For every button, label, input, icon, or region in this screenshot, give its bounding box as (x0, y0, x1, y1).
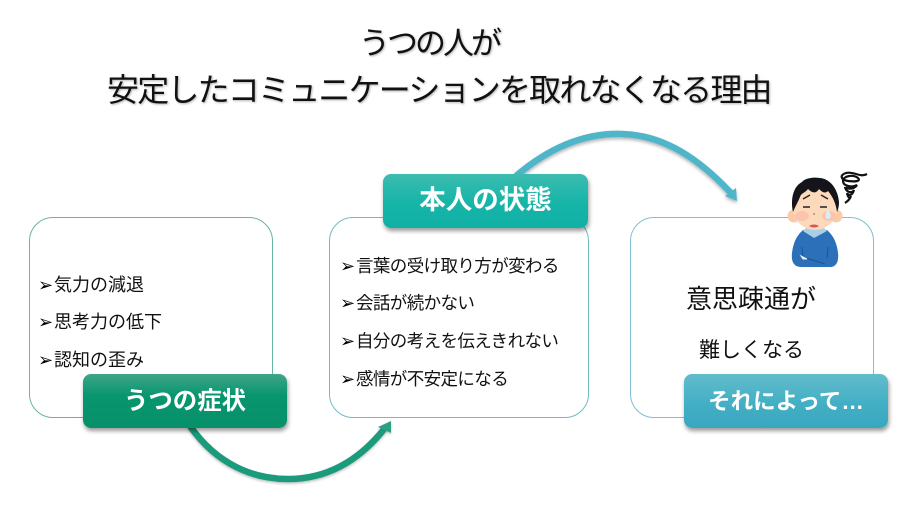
symptom list: ➢ (38, 275, 53, 295)
heading tag: depression symptoms: うつの症状 (124, 388, 246, 415)
symptom list: ➢ (38, 312, 53, 332)
state list: 感情が不安定になる (356, 369, 508, 389)
symptom list: 思考力の低下 (54, 312, 162, 332)
symptom list: ➢ (38, 350, 53, 370)
state list: 会話が続かない (356, 293, 474, 313)
sweat drop (826, 209, 831, 219)
icon: scribble worry mark (842, 173, 867, 203)
face (792, 180, 838, 230)
title: 安定したコミュニケーションを取れなくなる理由 (107, 72, 771, 108)
ears (788, 210, 800, 222)
state list: 言葉の受け取り方が変わる (356, 256, 559, 276)
result text: 意思疎通が (686, 284, 816, 314)
symptom list: 認知の歪み (54, 350, 144, 370)
state list: ➢ (340, 369, 355, 389)
panel: result (630, 217, 874, 418)
heading tag: as a result (684, 374, 888, 428)
state list: ➢ (340, 293, 355, 313)
panel: depression symptoms (29, 217, 273, 418)
state list: ➢ (340, 331, 355, 351)
title: うつの人が (359, 26, 499, 61)
eyes and mouth (803, 195, 828, 207)
heading tag: personal state: 本人の状態 (419, 185, 552, 215)
panel: personal state (329, 217, 589, 418)
icon: worried man (788, 172, 868, 267)
state list: 自分の考えを伝えきれない (356, 331, 558, 351)
heading tag: depression symptoms (83, 374, 287, 428)
symptom list (38, 275, 162, 370)
result text (686, 284, 816, 362)
symptom list: 気力の減退 (54, 275, 144, 295)
sweater (792, 230, 838, 267)
state list (340, 256, 559, 389)
result text: 難しくなる (699, 339, 804, 362)
hair (792, 178, 839, 212)
title (107, 26, 771, 108)
heading tag: as a result: それによって… (708, 389, 864, 414)
heading tag: personal state (383, 174, 588, 228)
state list: ➢ (340, 256, 355, 276)
